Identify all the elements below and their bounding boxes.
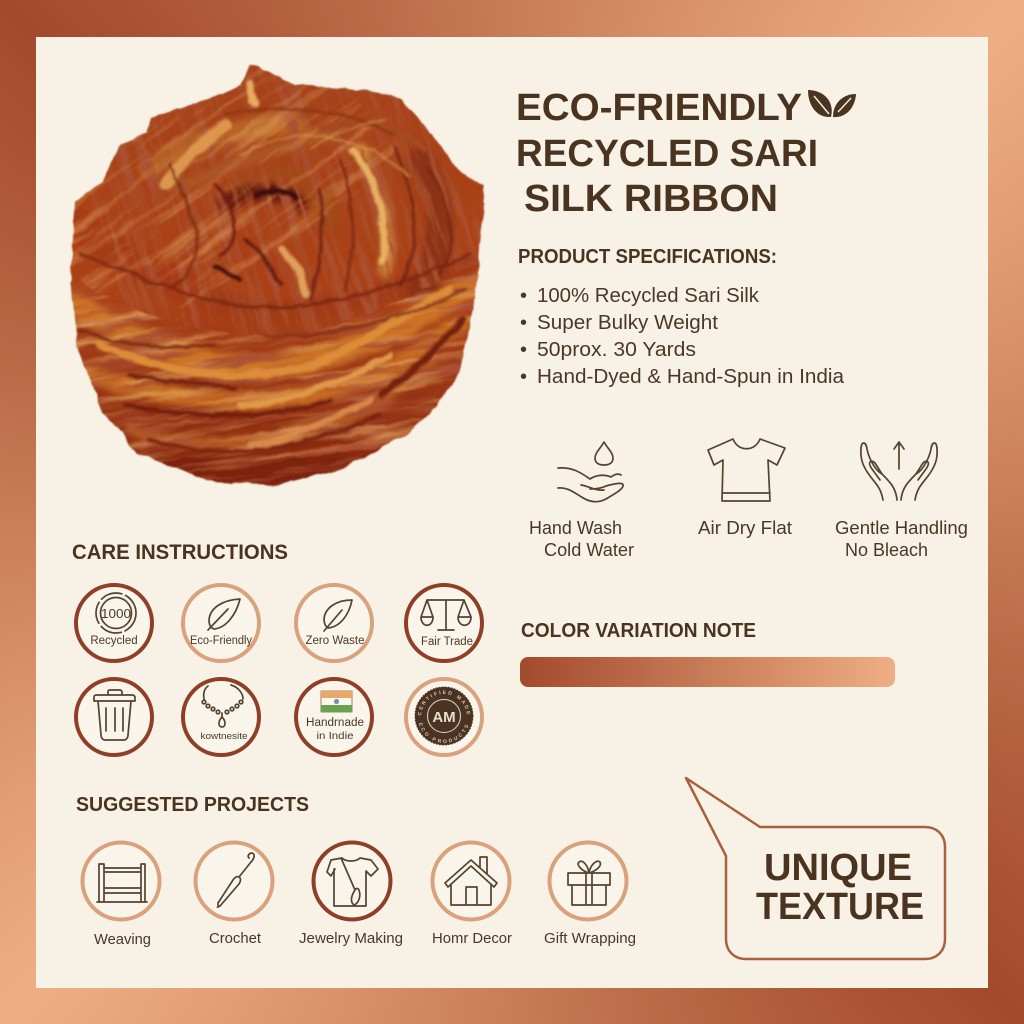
badge: eco-friendly: Eco-Friendly [190, 635, 252, 647]
product specifications: PRODUCT SPECIFICATIONS: [518, 246, 777, 268]
project: jewelry making: Jewelry Making [299, 930, 403, 947]
project: weaving [82, 842, 160, 948]
heading: suggested projects: SUGGESTED PROJECTS [76, 794, 309, 816]
project: crochet: Crochet [209, 930, 262, 947]
label: gentle handling [835, 518, 968, 560]
product specifications: Super Bulky Weight [537, 312, 718, 334]
badge: fair trade [406, 585, 482, 661]
badge: zero waste: Zero Waste [306, 635, 364, 647]
icon: gentle hands [861, 442, 937, 500]
label: air dry flat: Air Dry Flat [698, 518, 792, 538]
badge: handmade in india: in Indie [316, 730, 354, 742]
heading: color variation note: COLOR VARIATION NOTE [521, 620, 756, 642]
label: hand wash [529, 518, 634, 560]
title: RECYCLED SARI [516, 133, 818, 175]
product specifications [518, 246, 845, 388]
project: weaving: Weaving [94, 931, 151, 948]
label: gentle handling: Gentle Handling [835, 518, 968, 538]
title [516, 87, 818, 220]
project: jewelry making [299, 842, 403, 947]
project: home decor [432, 842, 512, 947]
icon: leaves [808, 90, 856, 117]
badge: handmade in india: Handrnade [306, 717, 364, 729]
badge: handmade in india [296, 679, 372, 755]
icon: hand wash [558, 442, 623, 502]
callout: unique texture [686, 778, 945, 959]
product specifications: 50prox. 30 Yards [537, 339, 696, 361]
product specifications: 100% Recycled Sari Silk [537, 285, 760, 307]
badge: AM seal: ECO PRODUCTS [418, 722, 468, 743]
badge: recycled: Recycled [90, 635, 138, 647]
badge: trash bin [76, 679, 152, 755]
badge: eco-friendly [183, 585, 259, 661]
label: gentle handling: No Bleach [845, 540, 928, 560]
callout: unique texture: TEXTURE [756, 886, 924, 928]
label: hand wash: Cold Water [544, 540, 634, 560]
title: ECO-FRIENDLY [516, 87, 802, 129]
badge: AM seal [404, 677, 484, 757]
heading: care instructions: CARE INSTRUCTIONS [72, 541, 288, 564]
product specifications: Hand-Dyed & Hand-Spun in India [537, 366, 845, 388]
project: crochet [196, 842, 272, 947]
badge: recycled: 1000 [101, 606, 131, 621]
icon: t-shirt [708, 439, 785, 501]
product specifications: • [520, 312, 527, 334]
badge: AM seal: AM [432, 709, 456, 726]
lower band fibre texture [71, 260, 480, 484]
product specifications: • [520, 339, 527, 361]
badge: fair trade: Fair Trade [421, 636, 473, 648]
badge: zero waste [296, 585, 372, 661]
product specifications: • [520, 285, 527, 307]
label: hand wash: Hand Wash [529, 518, 622, 538]
callout: unique texture: UNIQUE [764, 847, 912, 889]
project: gift wrapping: Gift Wrapping [544, 930, 636, 947]
product specifications: • [520, 366, 527, 388]
badge: recycled [76, 585, 152, 661]
upper swirl fibre texture [70, 66, 484, 336]
project: home decor: Homr Decor [432, 930, 512, 947]
project: gift wrapping [544, 842, 636, 947]
badge: necklace: kowtnesite [200, 731, 248, 742]
title: SILK RIBBON [524, 178, 778, 220]
color gradient bar [520, 657, 895, 687]
badge: AM seal: CERTIFIED MADE [418, 690, 470, 716]
yarn ball photo illustration [69, 64, 486, 488]
badge: necklace [183, 679, 259, 755]
